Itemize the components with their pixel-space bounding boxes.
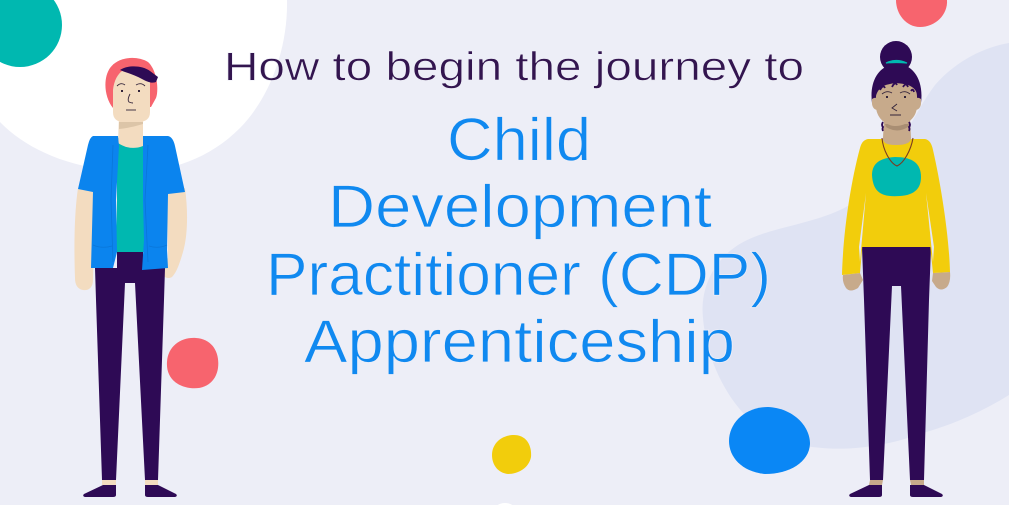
facial features: [117, 84, 145, 110]
neck shadow: [885, 124, 909, 130]
face: [876, 83, 917, 126]
jacket left panel: [78, 136, 119, 268]
neck: [883, 118, 911, 145]
small white dot bottom: [494, 503, 516, 505]
hair: [872, 64, 921, 103]
title line 1: Child: [447, 106, 591, 173]
necklace: [882, 138, 913, 166]
neck shadow: [119, 122, 143, 129]
sweater: [842, 139, 950, 275]
right arm: [160, 188, 187, 278]
title: programme name: [266, 106, 771, 375]
white blob top left: [0, 0, 287, 172]
shoes: [849, 485, 943, 497]
t-shirt: [116, 138, 144, 252]
mouth: [126, 109, 136, 111]
sleeve gaps: [859, 193, 934, 262]
title line 2: Development: [328, 173, 712, 240]
trousers: [862, 247, 931, 480]
figure: woman: [842, 41, 950, 497]
coral circle top right: [896, 0, 947, 27]
figure: man: [74, 58, 187, 497]
blue blob: [729, 407, 810, 474]
jacket fold lines: [93, 145, 167, 262]
nose: [128, 94, 133, 103]
eyes: [886, 96, 906, 98]
trousers: [95, 250, 165, 480]
yellow dot: [492, 435, 531, 474]
title line 4: Apprenticeship: [304, 308, 735, 375]
jacket right panel: [142, 136, 185, 270]
shoes: [83, 485, 177, 497]
teal circle top left: [0, 0, 62, 67]
hair bun: [880, 41, 912, 73]
ears: [872, 98, 921, 110]
brows: [117, 84, 145, 86]
face: [113, 71, 150, 122]
left arm: [74, 188, 95, 290]
headband: [886, 60, 907, 63]
title line 3: Practitioner (CDP): [266, 241, 771, 308]
ankles: [869, 480, 924, 485]
lavender blob right: [703, 43, 1009, 449]
hands: [843, 272, 950, 290]
hair wisps and earrings: [880, 83, 914, 131]
chest patch: [872, 157, 921, 196]
hair: [105, 58, 157, 108]
facial features: [882, 92, 910, 115]
ankles: [102, 480, 158, 485]
coral circle middle left: [167, 338, 218, 388]
eyes: [121, 90, 140, 92]
heading: How to begin the journey to: [224, 45, 804, 89]
forelock: [120, 66, 158, 83]
neck: [118, 115, 143, 148]
